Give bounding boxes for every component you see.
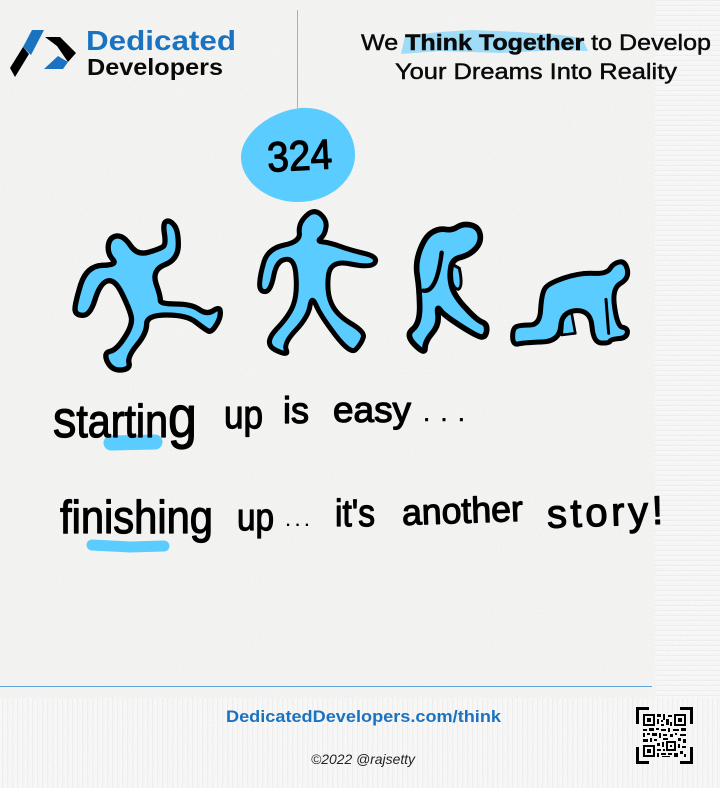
tagline line 2: Your Dreams Into Reality	[395, 59, 677, 84]
figure 3: slumping	[409, 224, 487, 351]
tagline	[361, 30, 711, 84]
badge: number 324	[241, 108, 355, 202]
footer	[226, 707, 502, 767]
QR corner brackets	[636, 707, 693, 764]
badge number: 324	[266, 130, 333, 181]
logo word: Dedicated: Dedicated	[86, 25, 236, 56]
line 1: starting up is easy: up	[224, 393, 263, 437]
line 2: finishing up it's another story	[60, 488, 664, 543]
brush highlight	[401, 30, 588, 54]
handwritten message	[53, 385, 664, 547]
footer url: DedicatedDevelopers.com/think	[226, 707, 502, 726]
line 1: starting up is easy: is	[283, 390, 309, 431]
line 2: finishing up it's another story: another	[401, 488, 524, 533]
QR code	[636, 707, 693, 764]
figures: four stages of tiring	[75, 212, 628, 370]
underline: starting	[111, 442, 155, 443]
figure 4: crawling	[513, 262, 628, 344]
line 1: starting up is easy	[53, 385, 465, 450]
figure 1: running	[75, 221, 220, 370]
line 1: starting up is easy: starting	[53, 385, 197, 450]
logo: Dedicated Developers	[10, 25, 236, 80]
badge blob	[241, 108, 355, 202]
line 2: finishing up it's another story: story!	[546, 489, 664, 537]
QR modules	[643, 714, 686, 757]
copyright: ©2022 @rajsetty	[311, 751, 416, 767]
tagline line 1: We Think Together to Develop	[361, 30, 711, 55]
line 1: starting up is easy: easy	[333, 389, 411, 430]
line 2: finishing up it's another story: finishing	[60, 491, 213, 543]
underline: finishing	[92, 545, 164, 547]
line 2: finishing up it's another story: ...	[285, 506, 310, 531]
figure 2: walking	[260, 212, 376, 353]
logo mark	[10, 30, 76, 77]
line 2: finishing up it's another story: up	[237, 497, 274, 539]
logo word: Developers: Developers	[87, 54, 223, 80]
line 1: starting up is easy: ...	[423, 397, 465, 427]
line 2: finishing up it's another story: it's	[335, 493, 375, 535]
